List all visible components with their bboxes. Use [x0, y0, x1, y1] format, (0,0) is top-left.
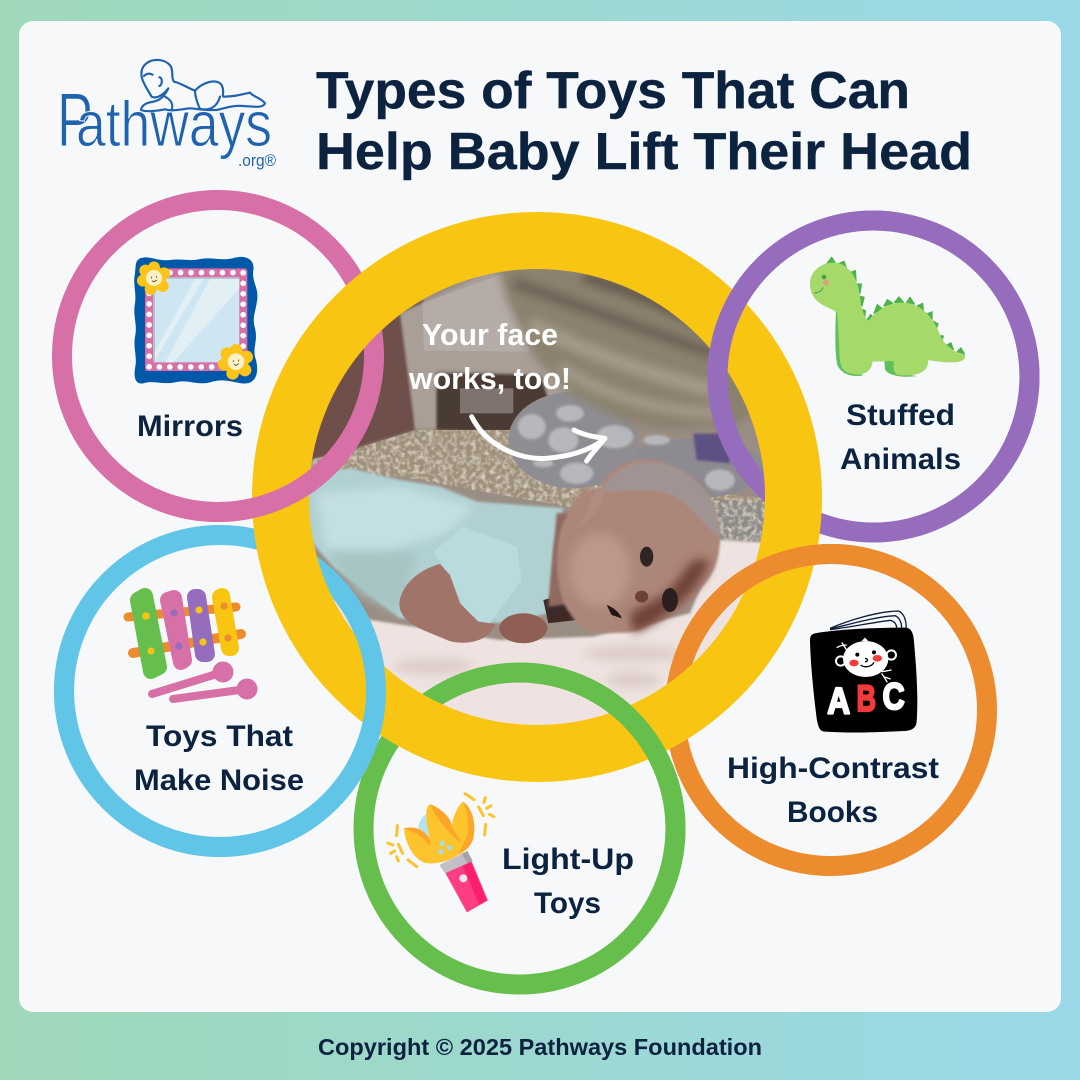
ring overlap: blue over yellow — [54, 620, 386, 857]
photo: shadow under dresser — [435, 372, 549, 430]
label: Stuffed Animals: Stuffed — [846, 399, 955, 432]
ring overlap: orange over yellow — [680, 544, 982, 640]
photo caption: Your face — [422, 317, 558, 352]
ring: toy circle purple — [718, 220, 1030, 532]
photo: white blanket — [332, 538, 760, 725]
panel: high-contrast books — [727, 611, 939, 829]
panel: mirrors — [134, 257, 257, 443]
title — [316, 62, 972, 181]
panel: light-up toys — [388, 794, 634, 920]
logo: Pathways.org — [57, 60, 276, 170]
ring overlap: green over yellow — [530, 662, 686, 994]
icon: flower bottom right — [218, 344, 253, 380]
photo: baby's head and face — [557, 460, 720, 633]
label: Mirrors: Mirrors — [137, 410, 243, 443]
panel: stuffed animals — [810, 257, 965, 476]
icon: light-up flower wand — [388, 794, 494, 911]
label: Stuffed Animals: Animals — [840, 443, 961, 476]
photo: drawer — [423, 273, 530, 352]
logo suffix: .org® — [238, 151, 276, 170]
icon: green dinosaur — [810, 257, 965, 377]
logo wordmark: athways — [76, 88, 272, 160]
label: Toys That Make Noise — [134, 720, 304, 797]
ring overlap: pink over yellow — [58, 400, 378, 522]
icon: black and white ABC book — [810, 611, 917, 733]
panel: toys that make noise — [128, 596, 304, 797]
label: Light-Up Toys — [502, 843, 634, 920]
label: Toys That Make Noise: Toys That — [146, 720, 293, 753]
label: High-Contrast Books: Books — [787, 796, 878, 829]
book cover letters: C — [883, 676, 905, 717]
ring: toy circle green — [364, 672, 676, 984]
photo: blurred hair — [495, 269, 750, 431]
ring: center yellow — [280, 240, 794, 754]
photo: baby's arm and hands — [399, 564, 495, 643]
label: Stuffed Animals — [840, 399, 961, 476]
label: High-Contrast Books: High-Contrast — [727, 752, 939, 785]
logo baby outline — [141, 60, 265, 111]
arrow: to the face — [472, 417, 605, 461]
book cover letters — [827, 676, 905, 721]
center photo: baby lifting head during tummy time — [309, 269, 765, 725]
logo wordmark: P — [57, 78, 93, 163]
ring: toy circle pink — [62, 200, 374, 512]
label: Toys That Make Noise: Make Noise — [134, 764, 304, 797]
footer copyright: Copyright © 2025 Pathways Foundation — [318, 1034, 762, 1060]
photo: sleeve — [433, 527, 522, 623]
title: Help Baby Lift Their Head — [316, 123, 972, 181]
photo: carpet — [310, 430, 765, 522]
ring overlap: purple over yellow — [708, 210, 1040, 440]
icon: xylophone and mallets — [128, 596, 257, 699]
ring: toy circle orange — [675, 554, 987, 866]
book cover letters: A — [827, 680, 850, 721]
icon: mirror — [134, 257, 257, 384]
label: Light-Up Toys: Light-Up — [502, 843, 634, 876]
photo: baby's blue onesie — [303, 468, 563, 623]
label: Light-Up Toys: Toys — [534, 887, 601, 920]
label: High-Contrast Books — [727, 752, 939, 829]
photo: dresser — [399, 272, 568, 429]
photo: parent's arm at left — [312, 299, 424, 459]
photo caption — [408, 317, 571, 396]
photo: gray pillow — [508, 392, 765, 498]
icon: flower top left — [137, 261, 170, 295]
title: Types of Toys That Can — [316, 62, 910, 120]
book cover letters: B — [857, 678, 876, 719]
photo caption: works, too! — [408, 361, 571, 396]
ring: toy circle blue — [64, 535, 376, 847]
